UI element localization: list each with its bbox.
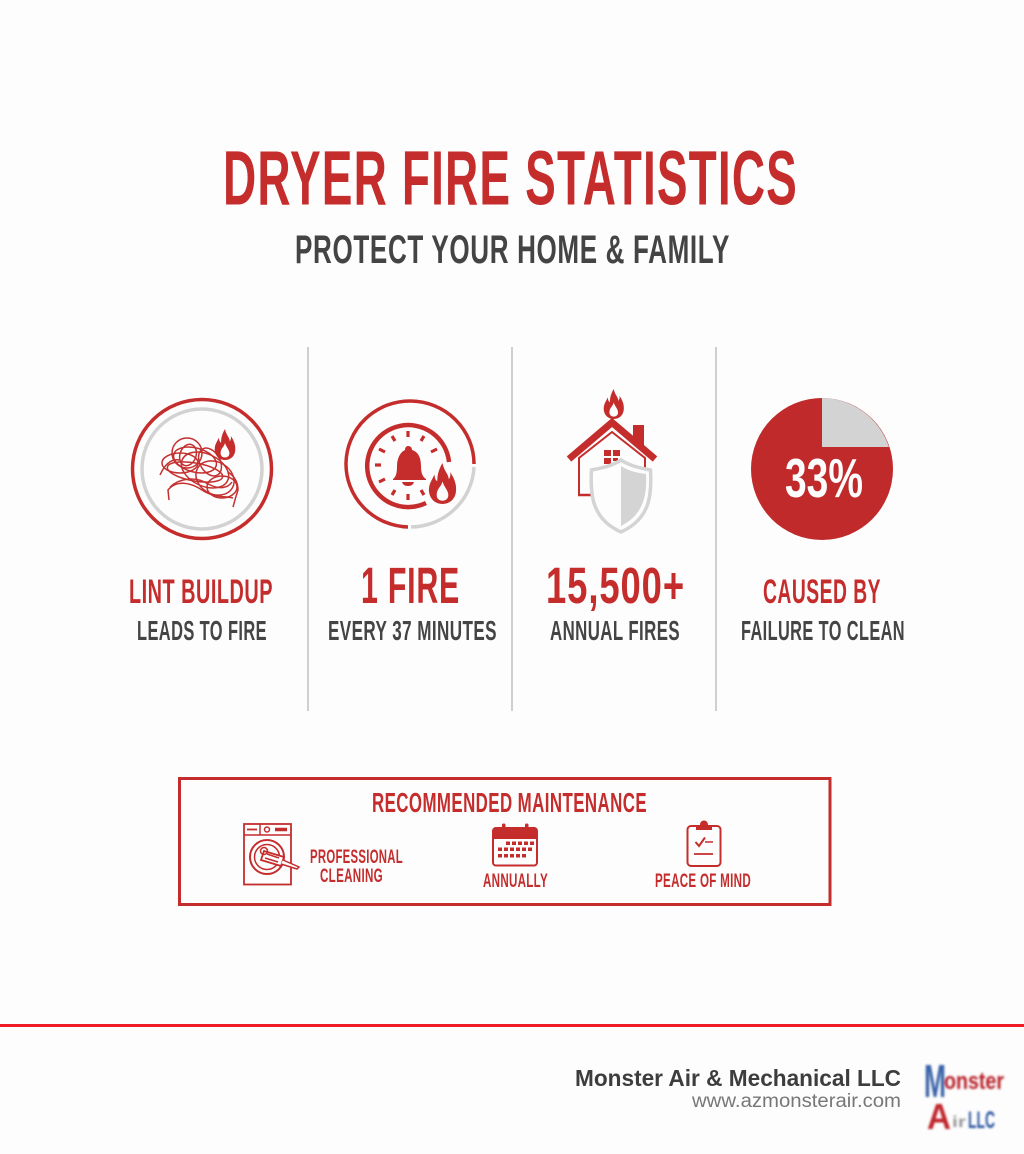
panel: annual fires <box>546 389 685 646</box>
panel: lint buildup <box>129 400 273 646</box>
stat: lint buildup: LINT BUILDUP <box>129 573 273 611</box>
label: professional cleaning: CLEANING <box>320 866 383 887</box>
label: annually: ANNUALLY <box>483 871 548 892</box>
icon: lint and flame <box>132 400 272 538</box>
footer <box>0 1024 1024 1137</box>
company logo: A <box>927 1096 951 1137</box>
website: www.azmonsterair.com <box>691 1091 901 1112</box>
pie chart: 33%: 33% <box>785 447 863 509</box>
label: professional cleaning <box>310 847 403 887</box>
subtitle: PROTECT YOUR HOME & FAMILY <box>295 228 730 272</box>
company logo <box>924 1055 1004 1137</box>
company logo: onster <box>944 1068 1004 1095</box>
company logo: LLC <box>968 1107 995 1134</box>
icon: washing machine with brush <box>244 824 299 884</box>
company logo: ir <box>952 1114 966 1131</box>
caption: failure to clean: FAILURE TO CLEAN <box>741 615 905 646</box>
icon: calendar <box>493 824 537 866</box>
label: professional cleaning: PROFESSIONAL <box>310 847 403 868</box>
panel: failure to clean <box>741 398 905 646</box>
pie chart: 33% <box>751 398 893 540</box>
stat: caused by: CAUSED BY <box>763 573 881 611</box>
icon: house, flame and shield <box>569 389 655 532</box>
company logo: M <box>924 1055 946 1107</box>
stat: 1 fire: 1 FIRE <box>361 557 460 614</box>
panel: recommended maintenance <box>180 778 830 904</box>
panel: fire frequency <box>328 401 497 646</box>
icon: clipboard checklist <box>688 820 720 866</box>
company name: Monster Air & Mechanical LLC <box>575 1065 901 1091</box>
stat: 15,500+: 15,500+ <box>546 557 685 614</box>
maintenance heading: RECOMMENDED MAINTENANCE <box>372 787 647 818</box>
caption: every 37 minutes: EVERY 37 MINUTES <box>328 615 497 646</box>
label: peace of mind: PEACE OF MIND <box>655 871 751 892</box>
caption: annual fires: ANNUAL FIRES <box>550 615 680 646</box>
icon: alarm clock and flame <box>346 401 474 527</box>
caption: leads to fire: LEADS TO FIRE <box>137 615 267 646</box>
